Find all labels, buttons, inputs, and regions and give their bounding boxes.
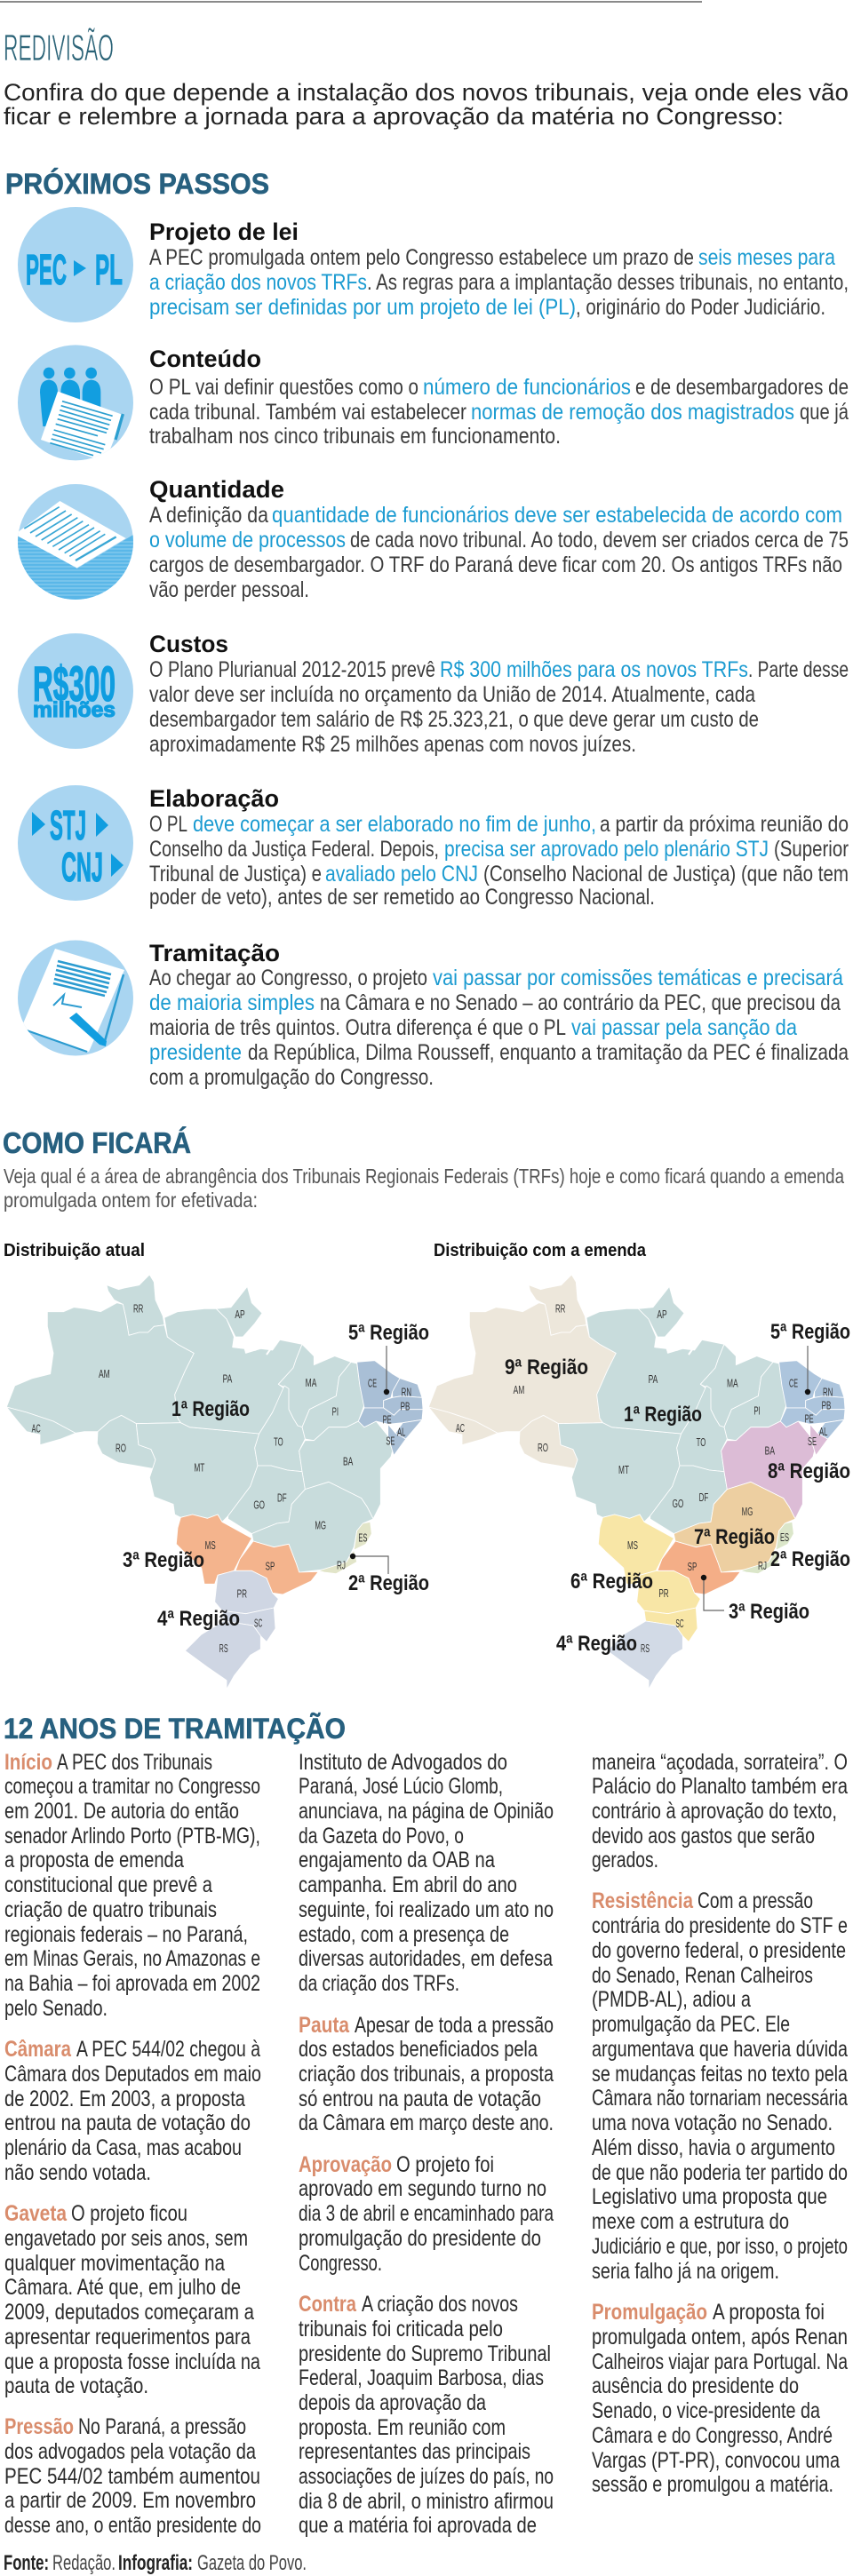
timeline column 1: constitucional que prevê a: [4, 1872, 212, 1897]
icon: PEC to PL: PEC: [26, 247, 67, 294]
step text: A definição da: [149, 503, 268, 528]
timeline column 3: Promulgação: [592, 2300, 707, 2325]
step text: [149, 657, 849, 757]
state labels: SE: [386, 1435, 395, 1448]
state labels: RS: [219, 1642, 228, 1655]
callout: 2ª região: 2ª Região: [348, 1571, 429, 1595]
step text: [149, 245, 849, 320]
source credit: Redação.: [52, 2551, 116, 2575]
callout: 3ª região: 3ª Região: [729, 1600, 809, 1624]
step text: [149, 503, 849, 602]
timeline column 2: só entrou na pauta de votação: [299, 2087, 541, 2111]
timeline column 2: diversas autoridades, em defesa: [299, 1946, 553, 1971]
state labels: GO: [673, 1497, 683, 1510]
intro text: [4, 79, 849, 130]
timeline column 2: da criação dos TRFs.: [299, 1971, 459, 1996]
timeline column 2: seguinte, foi realizado um ato no: [299, 1897, 554, 1922]
step text: trabalham nos cinco tribunais em funcionamento.: [149, 424, 561, 449]
timeline column 1: entrou na pauta de votação do: [4, 2111, 251, 2135]
callout: 5ª região: [348, 1321, 429, 1395]
states: [6, 1275, 423, 1690]
step text: com a promulgação do Congresso.: [149, 1065, 434, 1090]
intro text: Confira do que depende a instalação dos novos tribunais, veja onde eles vão: [4, 79, 849, 106]
heading: próximos passos: PRÓXIMOS PASSOS: [5, 168, 269, 200]
step heading: Conteúdo: [149, 346, 261, 372]
step text: precisam ser definidas por um projeto de lei (PL): [149, 295, 576, 320]
icon: stack of paper: [15, 484, 136, 604]
callout: 9ª região: 9ª Região: [505, 1356, 588, 1379]
step text: [149, 966, 849, 1090]
timeline column 1: 2009, deputados começaram a: [4, 2300, 254, 2325]
state labels: SP: [688, 1560, 697, 1573]
map intro text: promulgada ontem for efetivada:: [4, 1189, 258, 1212]
state labels: SC: [675, 1617, 684, 1630]
timeline column 2: promulgação do presidente do: [299, 2226, 541, 2251]
state labels: PI: [753, 1404, 761, 1418]
source credit: Fonte:: [4, 2551, 49, 2575]
state labels: AL: [819, 1425, 827, 1438]
timeline column 1: A PEC 544/02 chegou à: [76, 2037, 260, 2062]
timeline column 2: estado, com a presença de: [299, 1922, 509, 1947]
state labels: PA: [649, 1372, 658, 1386]
panel: tramitação: [18, 940, 849, 1090]
state labels: MS: [205, 1538, 216, 1552]
state labels: DF: [699, 1491, 708, 1504]
step text: aproximadamente R$ 25 milhões apenas com novos juízes.: [149, 732, 636, 757]
state labels: RJ: [758, 1559, 767, 1572]
timeline column 3: A proposta foi: [713, 2300, 825, 2325]
state labels: RJ: [337, 1559, 346, 1572]
icon: PEC to PL: [18, 207, 133, 322]
timeline column 2: dia 8 de abril, o ministro afirmou: [299, 2489, 554, 2514]
state labels: PB: [822, 1399, 831, 1412]
state labels: PI: [332, 1404, 339, 1418]
timeline column 1: A PEC dos Tribunais: [57, 1750, 212, 1775]
step heading: Quantidade: [149, 476, 284, 503]
timeline column 1: Gaveta: [4, 2201, 68, 2226]
timeline column 1: pelo Senado.: [4, 1996, 108, 2021]
timeline column 2: Instituto de Advogados do: [299, 1750, 507, 1775]
state labels: ES: [780, 1530, 789, 1544]
panel: quantidade: [15, 476, 849, 604]
timeline column 2: depois da aprovação da: [299, 2390, 486, 2415]
timeline column 1: em 2001. De autoria do então: [4, 1799, 239, 1824]
timeline column 1: criação de quatro tribunais: [4, 1897, 217, 1922]
icon: R$ 300 milhões: [18, 633, 133, 749]
state labels: MA: [306, 1376, 316, 1389]
timeline column 1: em Minas Gerais, no Amazonas e: [4, 1946, 260, 1971]
timeline column 1: Câmara. Até que, em julho de: [4, 2275, 241, 2300]
timeline column 1: Câmara: [4, 2037, 72, 2062]
step text: O PL vai definir questões como o: [149, 375, 419, 400]
step text: Conselho da Justiça Federal. Depois,: [149, 837, 439, 862]
timeline column 2: Contra: [299, 2292, 357, 2317]
state labels: [32, 1301, 411, 1655]
timeline column 1: dos advogados pela votação da: [4, 2439, 256, 2464]
step text: avaliado pelo CNJ: [325, 862, 478, 886]
step text: Tribunal de Justiça) e: [149, 862, 322, 886]
state labels: AP: [657, 1308, 667, 1321]
icon: PEC to PL: PL: [95, 247, 123, 294]
icon: STJ and CNJ: STJ: [50, 802, 86, 848]
step text: [149, 812, 849, 910]
step text: a criação dos novos TRFs: [149, 270, 367, 295]
source credit: Gazeta do Povo.: [197, 2551, 307, 2575]
timeline column 3: (PMDB-AL), adiou a: [592, 1987, 751, 2012]
map intro text: [4, 1165, 844, 1212]
state labels: AL: [397, 1426, 405, 1439]
state labels: PR: [237, 1586, 247, 1600]
step text: presidente: [149, 1040, 242, 1065]
title: REDIVISÃO: [4, 27, 114, 68]
timeline column 2: Paraná, José Lúcio Glomb,: [299, 1774, 503, 1799]
state labels: PE: [805, 1412, 814, 1426]
step text: Ao chegar ao Congresso, o projeto: [149, 966, 427, 990]
callout: 6ª região: 6ª Região: [570, 1570, 653, 1594]
state labels: BA: [765, 1444, 775, 1458]
timeline column 3: gerados.: [592, 1848, 658, 1872]
step text: cada tribunal. Também vai estabelecer: [149, 400, 466, 425]
timeline column 1: qualquer movimentação na: [4, 2251, 225, 2276]
step text: [149, 375, 849, 449]
callout: 1ª região: 1ª Região: [624, 1403, 702, 1427]
callout: 5ª região: [770, 1320, 850, 1395]
step text: O PL: [149, 812, 187, 837]
timeline column 1: senador Arlindo Porto (PTB-MG),: [4, 1824, 260, 1849]
icon: signed document and pen: [18, 940, 133, 1055]
heading: como ficará: COMO FICARÁ: [3, 1126, 191, 1159]
heading: 12 anos de tramitação: 12 ANOS DE TRAMITAÇÃO: [4, 1713, 346, 1745]
map heading: com a emenda: Distribuição com a emenda: [434, 1241, 647, 1260]
timeline column 1: na Bahia – foi aprovada em 2002: [4, 1971, 260, 1996]
timeline column 1: desse ano, o então presidente do: [4, 2513, 261, 2538]
state labels: SC: [254, 1617, 263, 1630]
timeline column 2: Congresso.: [299, 2251, 382, 2276]
timeline column 1: começou a tramitar no Congresso: [4, 1774, 260, 1799]
timeline column 2: engajamento da OAB na: [299, 1848, 495, 1872]
timeline column 1: apresentar requerimentos para: [4, 2325, 251, 2349]
panel: custos: [18, 631, 849, 757]
map heading: atual: Distribuição atual: [4, 1241, 145, 1260]
timeline column 3: ausência do presidente do: [592, 2373, 799, 2398]
timeline column 2: Pauta: [299, 2013, 350, 2038]
timeline column 1: PEC 544/02 também aumentou: [4, 2464, 260, 2489]
timeline column 1: Câmara dos Deputados em maio: [4, 2062, 261, 2087]
timeline column 2: dia 3 de abril e encaminhado para: [299, 2201, 554, 2226]
timeline column 2: Federal, Joaquim Barbosa, dias: [299, 2365, 544, 2390]
timeline column 2: presidente do Supremo Tribunal: [299, 2341, 551, 2366]
icon: STJ and CNJ: CNJ: [61, 844, 103, 890]
step text: deve começar a ser elaborado no fim de junho,: [193, 812, 596, 837]
timeline column 2: O projeto foi: [396, 2152, 494, 2177]
state labels: AM: [99, 1367, 110, 1380]
callout: 5ª região: 5ª Região: [348, 1321, 429, 1345]
state labels: GO: [253, 1498, 265, 1511]
state labels: AC: [32, 1421, 41, 1435]
icon: people and document: [18, 345, 133, 462]
step text: vão perder pessoal.: [149, 577, 309, 602]
callout: 2ª região: [348, 1554, 429, 1595]
state labels: MS: [627, 1538, 638, 1552]
timeline column 1: a partir de 2009. Em novembro: [4, 2488, 256, 2513]
icon: R$ 300 milhões: milhões: [33, 698, 116, 722]
timeline column 2: que a matéria foi aprovada de: [299, 2513, 537, 2538]
source credit: Infografia:: [118, 2551, 193, 2575]
step heading: Projeto de lei: [149, 219, 299, 245]
timeline column 2: campanha. Em abril do ano: [299, 1872, 517, 1897]
state labels: TO: [697, 1435, 706, 1449]
state labels: CE: [789, 1377, 798, 1390]
source credit: [4, 2551, 307, 2575]
state labels: RR: [133, 1301, 143, 1315]
timeline column 1: a proposta de emenda: [4, 1848, 184, 1872]
callout: 4ª região: 4ª Região: [157, 1607, 240, 1631]
timeline column 1: que a proposta fosse incluída na: [4, 2349, 260, 2374]
step text: vai passar pela sanção da: [571, 1015, 797, 1040]
timeline column 2: da Gazeta do Povo, o: [299, 1824, 464, 1849]
timeline column 3: Com a pressão: [698, 1888, 813, 1913]
state labels: CE: [368, 1377, 377, 1390]
state labels: PR: [658, 1586, 669, 1600]
state labels: DF: [277, 1491, 287, 1505]
timeline column 1: regionais federais – no Paraná,: [4, 1922, 248, 1947]
timeline column 2: anunciava, na página de Opinião: [299, 1799, 554, 1824]
state labels: RO: [116, 1441, 126, 1454]
timeline column 2: criação dos tribunais, a proposta: [299, 2062, 554, 2087]
state labels: AP: [235, 1308, 245, 1321]
timeline column 2: associações de juízes do país, no: [299, 2464, 554, 2489]
step text: de maioria simples: [149, 990, 315, 1015]
state labels: RR: [555, 1301, 565, 1315]
icon: STJ and CNJ: [18, 785, 133, 901]
map: distribuição atual: [6, 1275, 429, 1690]
step text: normas de remoção dos magistrados: [471, 400, 794, 425]
callout: 7ª região: 7ª Região: [694, 1525, 775, 1549]
timeline column 1: de 2002. Em 2003, a proposta: [4, 2087, 245, 2111]
timeline column 1: pauta de votação.: [4, 2373, 148, 2398]
state labels: MG: [742, 1505, 753, 1518]
step text: número de funcionários: [423, 375, 631, 400]
state labels: MA: [727, 1376, 738, 1389]
state labels: PE: [383, 1413, 392, 1427]
timeline column 1: No Paraná, a pressão: [78, 2414, 246, 2439]
callout: 1ª região: 1ª Região: [171, 1397, 250, 1421]
callout: 3ª região: 3ª Região: [123, 1548, 204, 1572]
step heading: Tramitação: [149, 940, 280, 966]
state labels: BA: [343, 1454, 353, 1467]
timeline column 2: dos estados beneficiados pela: [299, 2037, 538, 2062]
state labels: MT: [194, 1461, 204, 1475]
state labels: SP: [266, 1560, 275, 1573]
state labels: PA: [223, 1372, 232, 1386]
timeline column 3: mexe com a estrutura do: [592, 2209, 789, 2234]
timeline column 3: Resistência: [592, 1888, 694, 1913]
step heading: Custos: [149, 631, 228, 657]
state labels: RN: [823, 1386, 833, 1399]
timeline column 2: [299, 1750, 554, 2538]
timeline column 2: da Câmara em março deste ano.: [299, 2111, 554, 2135]
step text: R$ 300 milhões para os novos TRFs: [440, 657, 748, 682]
timeline column 2: Apesar de toda a pressão: [355, 2013, 554, 2038]
timeline column 1: plenário da Casa, mas acabou: [4, 2135, 242, 2160]
state labels: [456, 1301, 833, 1655]
state labels: RN: [402, 1386, 411, 1399]
state labels: RO: [538, 1441, 548, 1454]
states: [428, 1275, 845, 1690]
timeline column 2: proposta. Em reunião com: [299, 2415, 506, 2440]
timeline column 2: representantes das principais: [299, 2439, 530, 2464]
timeline column 2: aprovado em segundo turno no: [299, 2176, 546, 2201]
map: distribuição com a emenda: [428, 1275, 850, 1690]
timeline column 1: O projeto ficou: [71, 2201, 187, 2226]
icon: R$ 300 milhões: R$300: [33, 656, 116, 712]
state labels: AM: [514, 1383, 524, 1396]
step text: O Plano Plurianual 2012-2015 prevê: [149, 657, 435, 682]
timeline column 1: engavetado por seis anos, sem: [4, 2226, 248, 2251]
state labels: AC: [456, 1421, 465, 1435]
state labels: TO: [274, 1435, 283, 1449]
timeline column 1: não sendo votada.: [4, 2160, 151, 2185]
state labels: ES: [358, 1531, 367, 1545]
callout: 3ª região: [701, 1575, 809, 1624]
step text: o volume de processos: [149, 528, 346, 553]
state labels: SE: [808, 1435, 817, 1448]
timeline column 3: seria falho já na origem.: [592, 2259, 779, 2284]
timeline column 1: Pressão: [4, 2414, 74, 2439]
state labels: MT: [618, 1463, 629, 1476]
state labels: MG: [315, 1519, 326, 1532]
timeline column 1: [4, 1750, 261, 2538]
panel: projeto de lei: [18, 207, 849, 322]
callout: 4ª região: 4ª Região: [556, 1632, 637, 1656]
timeline column 2: tribunais foi criticada pelo: [299, 2317, 503, 2341]
step text: precisa ser aprovado pelo plenário STJ: [444, 837, 769, 862]
state labels: PB: [401, 1399, 410, 1412]
step text: poder de veto), antes de ser remetido ao Congresso Nacional.: [149, 885, 655, 910]
state labels: RS: [641, 1642, 650, 1655]
panel: conteúdo: [18, 345, 849, 462]
timeline column 3: [592, 1750, 848, 2497]
step text: A PEC promulgada ontem pelo Congresso estabelece um prazo de: [149, 245, 694, 270]
timeline column 2: Aprovação: [299, 2152, 392, 2177]
timeline column 3: promulgação da PEC. Ele: [592, 2012, 790, 2037]
timeline column 1: Início: [4, 1750, 52, 1775]
step text: maioria de três quintos. Outra diferença é que o PL: [149, 1015, 566, 1040]
intro text: ficar e relembre a jornada para a aprovação da matéria no Congresso:: [4, 103, 784, 130]
timeline column 2: A criação dos novos: [362, 2292, 518, 2317]
panel: elaboração: [18, 785, 849, 910]
step heading: Elaboração: [149, 785, 279, 812]
